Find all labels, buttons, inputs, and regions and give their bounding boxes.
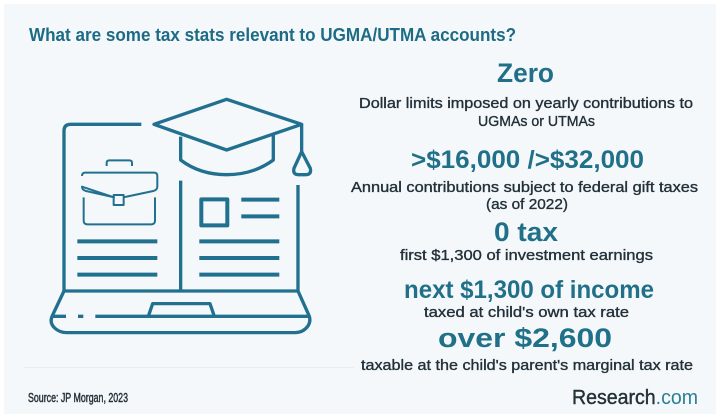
- stat: zero tax: first $1,300 of investment earnings: [400, 248, 653, 264]
- stat: zero: UGMAs or UTMAs: [478, 114, 595, 130]
- stat: next income: next $1,300 of income: [404, 276, 654, 304]
- title: What are some tax stats relevant to UGMA/UTMA accounts?: [29, 24, 516, 45]
- stat: gift tax threshold: [351, 146, 698, 213]
- stat: zero: Zero: [497, 58, 554, 88]
- stat: zero: [359, 58, 693, 130]
- stat: zero: Dollar limits imposed on yearly contributions to: [359, 96, 693, 112]
- stat: zero tax: 0 tax: [494, 217, 558, 247]
- stat: next income: [404, 276, 654, 321]
- stat: gift tax threshold: >$16,000 />$32,000: [411, 146, 644, 174]
- stat: over 2600: over $2,600: [438, 323, 612, 353]
- stat: next income: taxed at child's own tax rate: [424, 305, 629, 321]
- icon: laptop with graduation cap: [51, 99, 311, 333]
- stat: gift tax threshold: Annual contributions subject to federal gift taxes: [351, 180, 698, 196]
- logo: Research.com: [572, 387, 698, 409]
- stat: over 2600: [361, 323, 693, 374]
- stat: over 2600: taxable at the child's parent's marginal tax rate: [361, 358, 693, 374]
- stat: zero tax: [400, 217, 653, 264]
- source: Source: JP Morgan, 2023: [28, 391, 128, 405]
- stat: gift tax threshold: (as of 2022): [486, 197, 568, 213]
